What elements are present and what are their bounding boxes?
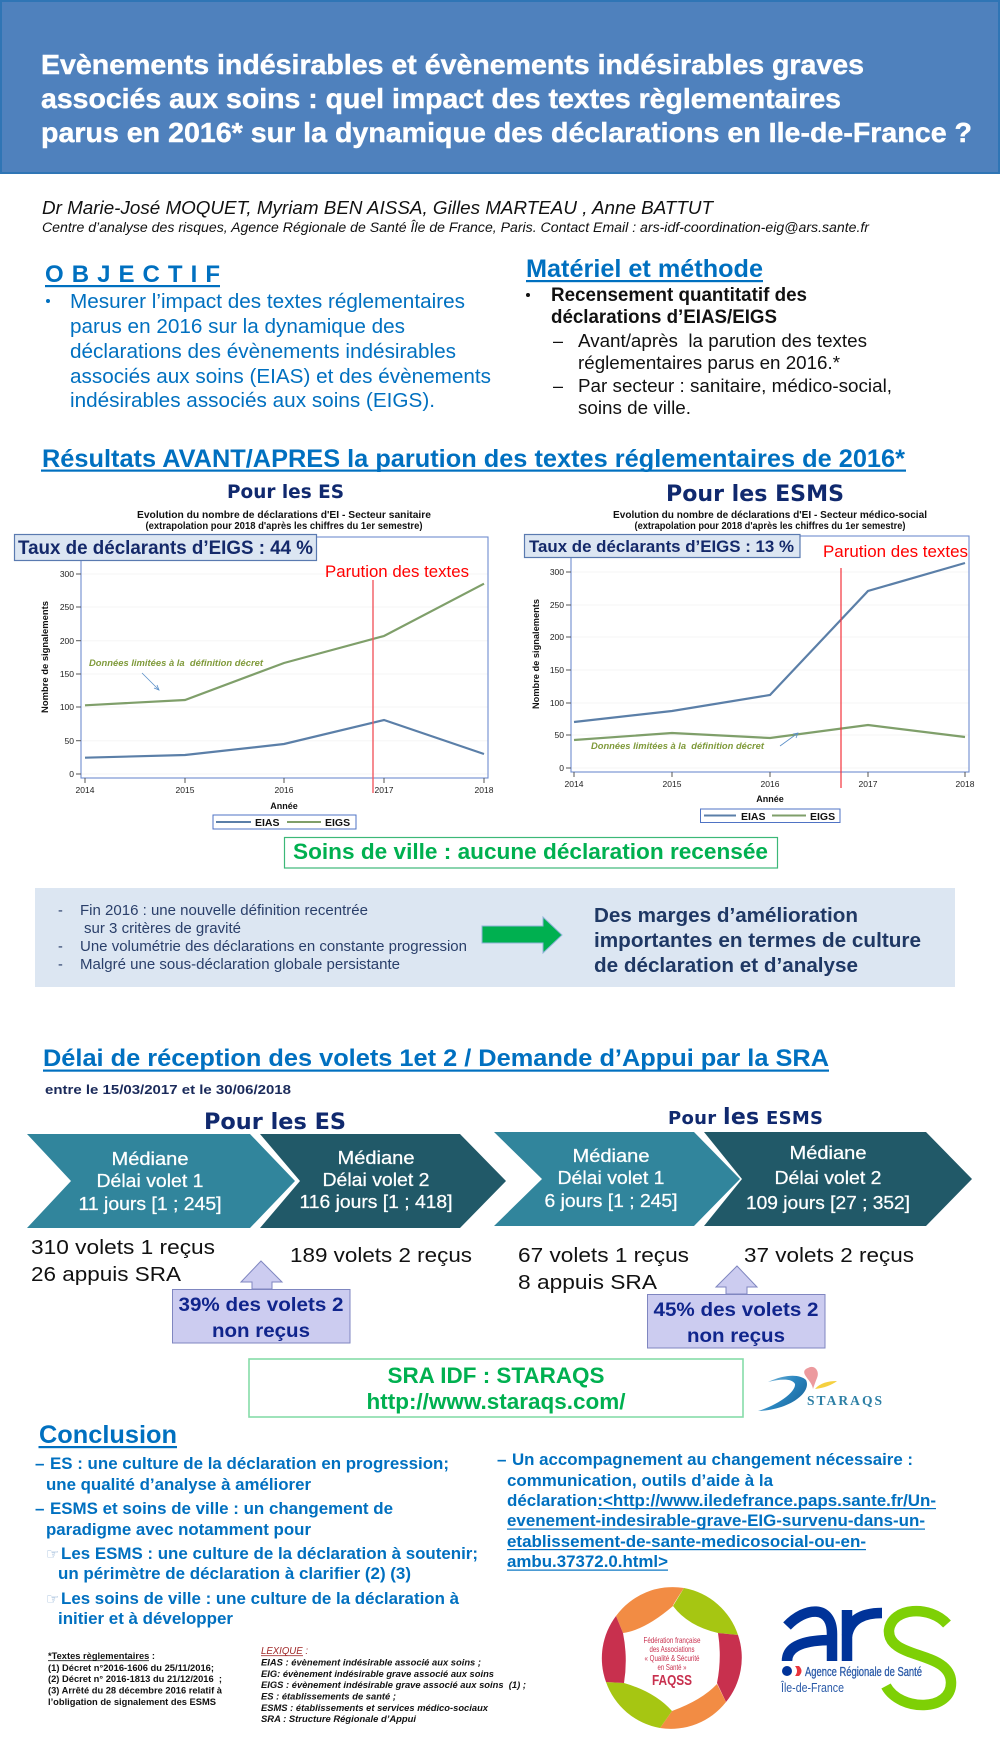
line chart ESMS: 50 <box>555 730 564 740</box>
chart title: (extrapolation pour 2018 d'après les chiffres du 1er semestre) <box>634 520 906 532</box>
objectif heading: OBJECTIF <box>45 261 220 288</box>
conclusion left text: ☞ <box>46 1545 59 1563</box>
callout: 39% <box>172 1261 350 1343</box>
results heading: Résultats AVANT/APRES la parution des textes réglementaires de 2016* <box>42 445 905 473</box>
line chart ESMS: 2017 <box>859 779 878 789</box>
authors and affiliation: Dr Marie-José MOQUET, Myriam BEN AISSA, Gilles MARTEAU , Anne BATTUT <box>42 197 715 218</box>
conclusion right text: communication, outils d’aide à la <box>507 1471 774 1490</box>
footnote: lexique <box>261 1646 526 1725</box>
title <box>41 49 972 148</box>
line chart ESMS: 100 <box>550 698 564 708</box>
line chart ES: Parution des textes <box>325 563 469 581</box>
conclusion left text: Les ESMS : une culture de la déclaration à soutenir; <box>61 1544 478 1563</box>
conclusion right text: – <box>497 1450 506 1469</box>
chevron: ESMS volet 2: Médiane <box>790 1143 866 1163</box>
synthesis bullets <box>58 903 467 973</box>
callout: SRA STARAQS: http://www.staraqs.com/ <box>366 1389 626 1414</box>
line chart ES: 2015 <box>176 785 195 795</box>
conclusion left text: – <box>35 1454 44 1473</box>
header banner <box>1 1 999 173</box>
line chart ESMS: 150 <box>550 665 564 675</box>
icon: STARAQS logo: STARAQS <box>807 1393 882 1408</box>
footnote: lexique: SRA : Structure Régionale d’Appui <box>261 1714 416 1725</box>
line chart ESMS: Parution des textes <box>823 543 968 561</box>
FAQSS wording: en Santé » <box>658 1662 687 1672</box>
footnote: textes réglementaires <box>48 1651 223 1708</box>
period: entre le 15/03/2017 et le 30/06/2018 <box>45 1083 291 1097</box>
line chart ES: Nombre de signalements <box>40 601 50 713</box>
FAQSS wording: des Associations <box>650 1644 694 1654</box>
release marker <box>372 580 374 793</box>
FAQSS wording: Fédération française <box>644 1635 701 1645</box>
line chart ESMS: 250 <box>550 600 564 610</box>
panel: chart ES <box>14 481 494 829</box>
panel: synthèse résultats <box>35 888 955 987</box>
panel: objectif <box>45 261 491 412</box>
icon: STARAQS logo <box>758 1367 882 1411</box>
objectif text: Mesurer l’impact des textes réglementaires <box>70 290 465 313</box>
conclusion left text: ☞ <box>46 1590 59 1608</box>
line chart ESMS: 300 <box>550 567 564 577</box>
conclusion left text: un périmètre de déclaration à clarifier (2) (3) <box>58 1564 411 1583</box>
line chart ESMS <box>531 536 975 823</box>
callout: SRA STARAQS <box>249 1359 743 1417</box>
conclusion right text: etablissement-de-sante-medicosocial-ou-en- <box>507 1532 866 1551</box>
title: parus en 2016* sur la dynamique des déclarations en Ile-de-France ? <box>41 117 972 148</box>
callout: 45%: non reçus <box>687 1326 785 1347</box>
chevron: ESMS volet 1: 6 jours [1 ; 245] <box>544 1191 678 1211</box>
counts: ES volet 2: 189 volets 2 reçus <box>290 1244 472 1267</box>
line chart ES: 2017 <box>375 785 394 795</box>
callout: soins de ville: Soins de ville : aucune déclaration recensée <box>293 839 768 864</box>
callout: 39%: 39% des volets 2 <box>178 1295 344 1316</box>
line chart ES: 2016 <box>275 785 294 795</box>
footnote: textes réglementaires: (1) Décret n°2016-1606 du 25/11/2016; <box>48 1663 214 1674</box>
series EIAS <box>574 563 965 722</box>
chevron: ES volet 1: Médiane <box>112 1149 188 1169</box>
heading: pour les ESMS: Pour les ESMS <box>668 1105 823 1130</box>
methode text: Avant/après la parution des textes <box>578 331 867 351</box>
conclusion right text: déclaration:<http://www.iledefrance.paps.sante.fr/Un- <box>507 1491 936 1510</box>
section heading: délai: Délai de réception des volets 1et 2 / Demande d’Appui par la SRA <box>43 1045 829 1072</box>
title: Evènements indésirables et évènements indésirables graves <box>41 49 864 80</box>
counts: ESMS volet 1: 8 appuis SRA <box>518 1271 657 1294</box>
legend: EIAS <box>741 811 766 823</box>
annotation arrow <box>780 733 798 746</box>
chevron: ES volet 1: 11 jours [1 ; 245] <box>78 1194 222 1214</box>
synthesis bullets: Fin 2016 : une nouvelle définition recentrée <box>80 903 368 919</box>
footnote: lexique: ES : établissements de santé ; <box>261 1692 396 1702</box>
annotation: Données limitées à la définition décret <box>591 741 765 752</box>
conclusion right text: evenement-indesirable-grave-EIG-survenu-dans-un- <box>507 1511 925 1530</box>
methode heading: Matériel et méthode <box>526 255 763 283</box>
line chart ES <box>40 537 494 829</box>
arrow: green <box>482 917 562 953</box>
legend <box>213 815 356 829</box>
taux badge ESMS: Taux de déclarants d’EIGS : 13 % <box>529 537 794 556</box>
chevron: ES volet 2: Délai volet 2 <box>322 1170 430 1190</box>
FAQSS wording <box>644 1635 701 1689</box>
footnote: textes réglementaires: (3) Arrêté du 28 décembre 2016 relatif à <box>48 1686 223 1696</box>
objectif text: parus en 2016 sur la dynamique des <box>70 315 405 338</box>
conclusion right text: Un accompagnement au changement nécessaire : <box>512 1450 913 1469</box>
panel: matériel et méthode <box>526 255 892 418</box>
line chart ES: 100 <box>60 702 74 712</box>
line chart ESMS: 2018 <box>956 779 975 789</box>
conclusion left text: paradigme avec notamment pour <box>46 1520 311 1539</box>
line chart ES: 300 <box>60 569 74 579</box>
chevron: ESMS volet 2: Délai volet 2 <box>774 1168 882 1188</box>
authors and affiliation: Centre d’analyse des risques, Agence Régionale de Santé Île de France, Paris. Contact Email : ars-idf-coordination-eig@ars.sante.fr <box>42 220 870 235</box>
chevron: ESMS volet 2: 109 jours [27 ; 352] <box>746 1193 910 1213</box>
chart title: Evolution du nombre de déclarations d'EI - Secteur sanitaire <box>137 509 431 521</box>
line chart ES: 2014 <box>76 785 95 795</box>
conclusion left text: Les soins de ville : une culture de la déclaration à <box>61 1589 460 1608</box>
methode text: Recensement quantitatif des <box>551 285 807 306</box>
legend: EIAS <box>255 817 280 829</box>
conclusion left text: initier et à développer <box>58 1609 233 1628</box>
chevron: ESMS volet 1: Médiane <box>572 1146 650 1166</box>
series EIGS <box>85 584 484 705</box>
chevron: ESMS volet 1 <box>494 1132 740 1226</box>
line chart ESMS: 2015 <box>663 779 682 789</box>
legend: EIGS <box>325 817 350 829</box>
conclusion left text: ESMS et soins de ville : un changement de <box>50 1499 393 1518</box>
chevron: ES volet 1: Délai volet 1 <box>96 1171 204 1191</box>
line chart ES: Année <box>270 801 298 811</box>
conclusion right text <box>497 1450 936 1571</box>
objectif text: indésirables associés aux soins (EIGS). <box>70 389 435 412</box>
synthesis conclusion: de déclaration et d’analyse <box>594 955 858 977</box>
counts: ESMS volet 2: 37 volets 2 reçus <box>744 1244 914 1267</box>
methode text: – <box>553 331 563 351</box>
FAQSS wording: FAQSS <box>652 1672 692 1689</box>
line chart ESMS: 2014 <box>565 779 584 789</box>
synthesis bullets: Une volumétrie des déclarations en constante progression <box>80 939 467 955</box>
series EIAS <box>85 720 484 758</box>
conclusion left text <box>35 1454 478 1628</box>
chevron: ESMS volet 1: Délai volet 1 <box>558 1168 664 1188</box>
conclusion right text: ambu.37372.0.html> <box>507 1552 668 1571</box>
annotation: Données limitées à la définition décret <box>89 658 264 669</box>
counts: ES volet 1: 310 volets 1 reçus <box>31 1236 215 1259</box>
counts: ES volet 1 <box>31 1236 215 1286</box>
methode text: Par secteur : sanitaire, médico-social, <box>578 376 892 396</box>
methode text: – <box>553 376 563 396</box>
heading: pour les ES: Pour les ES <box>227 481 344 503</box>
counts: ESMS volet 1 <box>518 1244 689 1294</box>
synthesis bullets: - <box>58 939 63 955</box>
legend <box>700 809 840 823</box>
chevron: ES volet 2: Médiane <box>338 1148 414 1168</box>
line chart ES: 50 <box>65 736 74 746</box>
line chart ESMS: 0 <box>559 763 564 773</box>
synthesis conclusion: Des marges d’amélioration <box>594 905 858 927</box>
methode text: réglementaires parus en 2016.* <box>578 353 840 373</box>
objectif text: déclarations des évènements indésirables <box>70 340 456 363</box>
line chart ES: 250 <box>60 602 74 612</box>
objectif text: associés aux soins (EIAS) et des évènements <box>70 365 491 388</box>
authors and affiliation <box>42 197 870 235</box>
release marker <box>840 568 842 788</box>
icon: ARS logo <box>780 1610 951 1705</box>
methode text: soins de ville. <box>578 398 691 418</box>
footnote: textes réglementaires: *Textes règlementaires : <box>48 1651 155 1662</box>
chart title <box>137 509 431 532</box>
legend: EIGS <box>810 811 835 823</box>
callout: SRA STARAQS: SRA IDF : STARAQS <box>388 1363 604 1388</box>
callout: 45% <box>648 1266 825 1348</box>
line chart ESMS: Année <box>756 794 784 804</box>
panel: chart ESMS <box>524 482 975 823</box>
series EIGS <box>574 725 965 740</box>
heading: pour les ES: Pour les ES <box>204 1110 346 1135</box>
title: associés aux soins : quel impact des textes règlementaires <box>41 83 841 114</box>
line chart ESMS: 2016 <box>761 779 780 789</box>
footnote: textes réglementaires: l’obligation de signalement des ESMS <box>48 1697 216 1708</box>
footnote: lexique: EIG: évènement indésirable grave associé aux soins <box>261 1669 494 1680</box>
chevron: ES volet 2 <box>260 1134 506 1228</box>
taux badge ES: Taux de déclarants d’EIGS : 44 % <box>18 538 313 559</box>
footnote: textes réglementaires: (2) Décret n° 2016-1813 du 21/12/2016 ; <box>48 1674 222 1685</box>
counts: ESMS volet 1: 67 volets 1 reçus <box>518 1244 689 1267</box>
conclusion left text: ES : une culture de la déclaration en progression; <box>50 1454 449 1473</box>
objectif text <box>46 290 491 412</box>
chart title: Evolution du nombre de déclarations d'EI - Secteur médico-social <box>613 509 927 521</box>
synthesis conclusion: importantes en termes de culture <box>594 930 921 952</box>
line chart ESMS: Nombre de signalements <box>531 599 541 709</box>
chevron: ESMS volet 2 <box>704 1132 972 1226</box>
chevron: ES volet 1 <box>27 1134 295 1228</box>
chart title: (extrapolation pour 2018 d'après les chiffres du 1er semestre) <box>146 520 422 532</box>
conclusion heading: Conclusion <box>39 1421 177 1449</box>
footnote: lexique: ESMS : établissements et services médico-sociaux <box>261 1703 489 1714</box>
synthesis bullets: - <box>58 957 63 973</box>
footnote: lexique: EIGS : évènement indésirable grave associé aux soins (1) ; <box>261 1680 526 1691</box>
footnote: lexique: LEXIQUE : <box>261 1646 308 1657</box>
synthesis conclusion <box>594 905 921 977</box>
annotation arrow <box>142 673 159 690</box>
callout: 45%: 45% des volets 2 <box>654 1300 818 1321</box>
heading: pour les ESMS: Pour les ESMS <box>666 482 844 507</box>
FAQSS wording: « Qualité & Sécurité <box>644 1653 700 1663</box>
line chart ES: 0 <box>69 769 74 779</box>
counts: ES volet 1: 26 appuis SRA <box>31 1263 181 1286</box>
conclusion left text: – <box>35 1499 44 1518</box>
callout: 39%: non reçus <box>212 1321 310 1342</box>
synthesis bullets: Malgré une sous-déclaration globale persistante <box>80 957 400 973</box>
line chart ESMS: 200 <box>550 632 564 642</box>
synthesis bullets: - <box>58 903 63 919</box>
icon: ARS logo: Agence Régionale de Santé <box>805 1665 922 1679</box>
line chart ES: 200 <box>60 636 74 646</box>
icon: ARS logo: Île-de-France <box>780 1680 844 1695</box>
chevron: ES volet 2: 116 jours [1 ; 418] <box>300 1192 452 1212</box>
methode text: déclarations d’EIAS/EIGS <box>551 307 777 328</box>
line chart ES: 150 <box>60 669 74 679</box>
footnote: lexique: EIAS : évènement indésirable associé aux soins ; <box>261 1658 481 1668</box>
line chart ES: 2018 <box>475 785 494 795</box>
icon: FAQSS logo <box>602 1587 742 1729</box>
synthesis bullets: sur 3 critères de gravité <box>84 921 241 937</box>
methode text <box>526 285 892 418</box>
chart title <box>613 509 927 532</box>
conclusion left text: une qualité d’analyse à améliorer <box>46 1475 311 1494</box>
